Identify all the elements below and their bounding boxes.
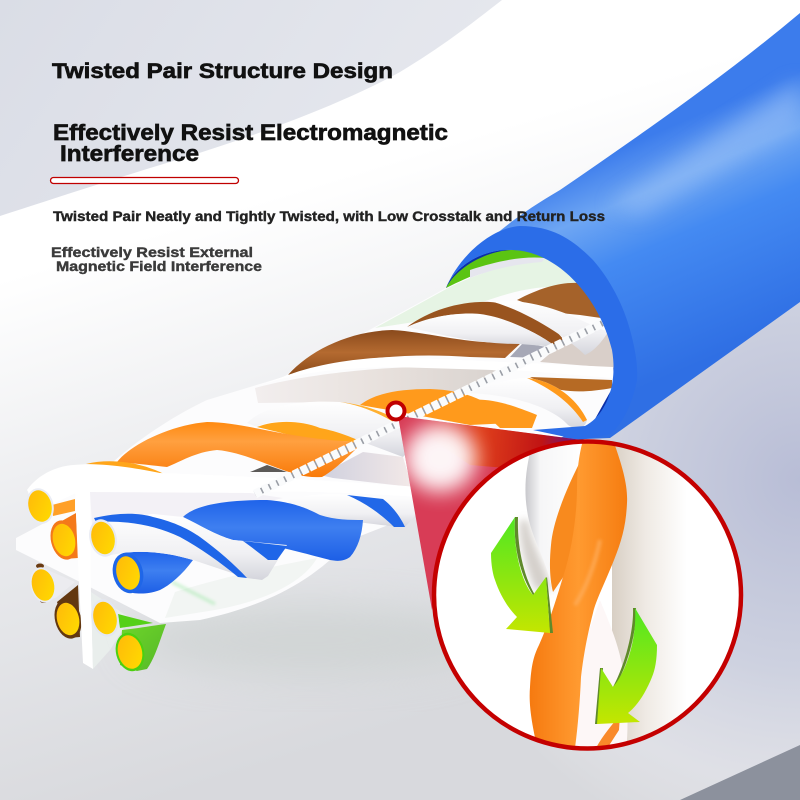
blue wire end — [108, 549, 148, 597]
green-white wire end — [118, 614, 153, 628]
green wire end — [120, 624, 166, 671]
title: Twisted Pair Structure Design — [52, 59, 393, 83]
white band across front — [27, 464, 420, 510]
callout anchor dot — [388, 402, 404, 420]
pale green upper wire — [375, 258, 592, 328]
shadow beside white strand — [520, 520, 552, 590]
brown wires, upper pair — [288, 283, 612, 391]
shadow patch — [510, 343, 553, 358]
body text: Effectively Resist External — [51, 244, 253, 260]
white horizontal band — [260, 357, 613, 385]
accent pill — [50, 178, 238, 184]
cross separator — [75, 490, 130, 669]
lower white arc — [165, 558, 317, 618]
white strand, upper — [526, 451, 552, 586]
white inner bundle body — [16, 258, 614, 623]
thin orange strand, lower — [597, 722, 620, 746]
heading — [53, 120, 448, 166]
pale inner panel near jacket — [540, 332, 614, 368]
white strand, lower — [612, 630, 628, 744]
cable jacket — [446, 13, 800, 440]
green wire inside jacket — [446, 250, 545, 288]
drain wire — [255, 322, 605, 494]
body text: Magnetic Field Interference — [56, 258, 262, 274]
subheading: Twisted Pair Neatly and Tightly Twisted, with Low Crosstalk and Return Loss — [53, 208, 605, 224]
heading: Effectively Resist Electromagnetic — [53, 120, 448, 145]
heading: Interference — [60, 141, 199, 166]
magnified detail lens — [434, 440, 741, 750]
callout beam — [398, 416, 590, 610]
blue wires, front pair — [94, 494, 416, 594]
cable opening: dark interior — [446, 250, 614, 430]
brown wire end — [57, 585, 80, 638]
jacket inner ring — [446, 226, 637, 440]
twisted pair bundle — [16, 258, 614, 674]
orange strand, back — [550, 465, 578, 592]
orange strand, front — [530, 440, 627, 748]
right green arrow — [595, 608, 657, 724]
beige shadow behind wires — [612, 446, 674, 741]
brown-white wire end — [36, 564, 44, 568]
orange wire end — [60, 513, 78, 559]
left conductor ends — [23, 485, 85, 642]
blue-white wire end — [85, 516, 121, 560]
right conductor ends — [85, 516, 166, 674]
pale strand shading — [255, 367, 505, 405]
left green arrow — [491, 517, 553, 633]
orange-white wire end — [52, 499, 75, 516]
white strand over orange pairs — [247, 402, 420, 457]
body text — [51, 244, 262, 274]
orange wires, centre pair — [86, 378, 587, 477]
lavender wedge under centre pair — [320, 452, 412, 487]
